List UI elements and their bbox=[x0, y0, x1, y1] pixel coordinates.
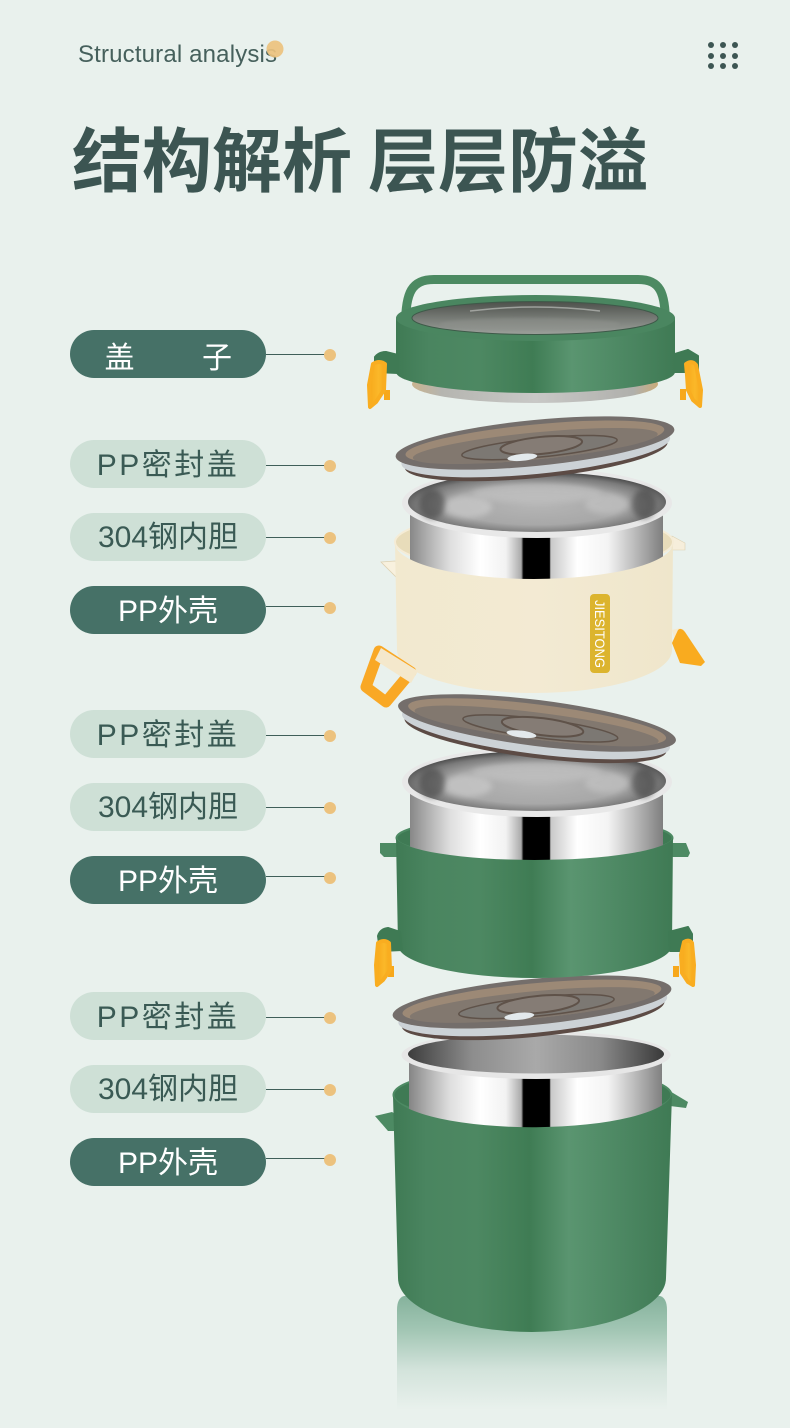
bottom steel liner bbox=[402, 1031, 670, 1135]
middle seal lid bbox=[394, 683, 679, 775]
label: 304 steel liner 1: 304钢内胆 bbox=[98, 521, 238, 554]
bottom green shell: back rim and tabs bbox=[375, 1067, 688, 1131]
product: exploded lunch box illustration bbox=[366, 280, 705, 1410]
brand plate: JIESITONG: JIESITONG bbox=[592, 600, 608, 668]
label: PP shell 1: PP外壳 bbox=[118, 595, 218, 628]
cream shell: back rim and tab bbox=[381, 513, 685, 580]
label: 304 steel liner 1 bbox=[70, 513, 336, 561]
top cover bbox=[369, 280, 701, 407]
top steel liner bbox=[402, 468, 672, 583]
icon: nine dot menu bbox=[708, 42, 738, 69]
title: 层层防溢 bbox=[368, 123, 648, 201]
label: lid: 盖 bbox=[104, 342, 134, 375]
bottom seal lid bbox=[390, 966, 675, 1050]
label: 304 steel liner 2: 304钢内胆 bbox=[98, 791, 238, 824]
label: PP shell 3: PP外壳 bbox=[118, 1147, 218, 1180]
cream shell handle: left bbox=[366, 648, 418, 702]
floor reflection bbox=[397, 1296, 667, 1410]
cover clip: right bbox=[675, 350, 701, 406]
cover glass window bbox=[412, 302, 658, 334]
label: PP shell 2: PP外壳 bbox=[118, 865, 218, 898]
label: PP seal lid 1 bbox=[70, 440, 336, 488]
cover underside steel bbox=[412, 365, 658, 403]
label: PP seal lid 3: PP密封盖 bbox=[97, 1001, 239, 1034]
cover top rim bbox=[396, 295, 675, 341]
cream shell handle: right bbox=[672, 628, 705, 666]
middle green shell: back rim and tabs bbox=[380, 817, 690, 859]
label: lid: 子 bbox=[202, 342, 232, 375]
middle steel liner bbox=[402, 747, 672, 866]
middle green shell: body bbox=[396, 838, 673, 978]
top seal lid bbox=[393, 406, 678, 491]
label: PP shell 1 bbox=[70, 586, 336, 634]
cover carry handle bbox=[406, 280, 666, 325]
label: PP seal lid 1: PP密封盖 bbox=[97, 449, 239, 482]
label: 304 steel liner 2 bbox=[70, 783, 336, 831]
label: 304 steel liner 3: 304钢内胆 bbox=[98, 1073, 238, 1106]
cover green body bbox=[396, 318, 675, 393]
label: 304 steel liner 3 bbox=[70, 1065, 336, 1113]
label: lid bbox=[70, 330, 336, 378]
middle shell clip: left bbox=[376, 928, 402, 985]
label: PP shell 2 bbox=[70, 856, 336, 904]
subtitle: Structural analysis: Structural analysis bbox=[78, 41, 277, 68]
middle shell clip: right bbox=[669, 927, 694, 985]
title: 结构解析 bbox=[72, 123, 352, 201]
label: PP shell 3 bbox=[70, 1138, 336, 1186]
label: PP seal lid 2: PP密封盖 bbox=[97, 719, 239, 752]
label: PP seal lid 3 bbox=[70, 992, 336, 1040]
bottom green shell: body bbox=[393, 1094, 672, 1332]
cover clip: left bbox=[369, 352, 398, 407]
cream shell: body bbox=[395, 543, 673, 693]
label: PP seal lid 2 bbox=[70, 710, 336, 758]
